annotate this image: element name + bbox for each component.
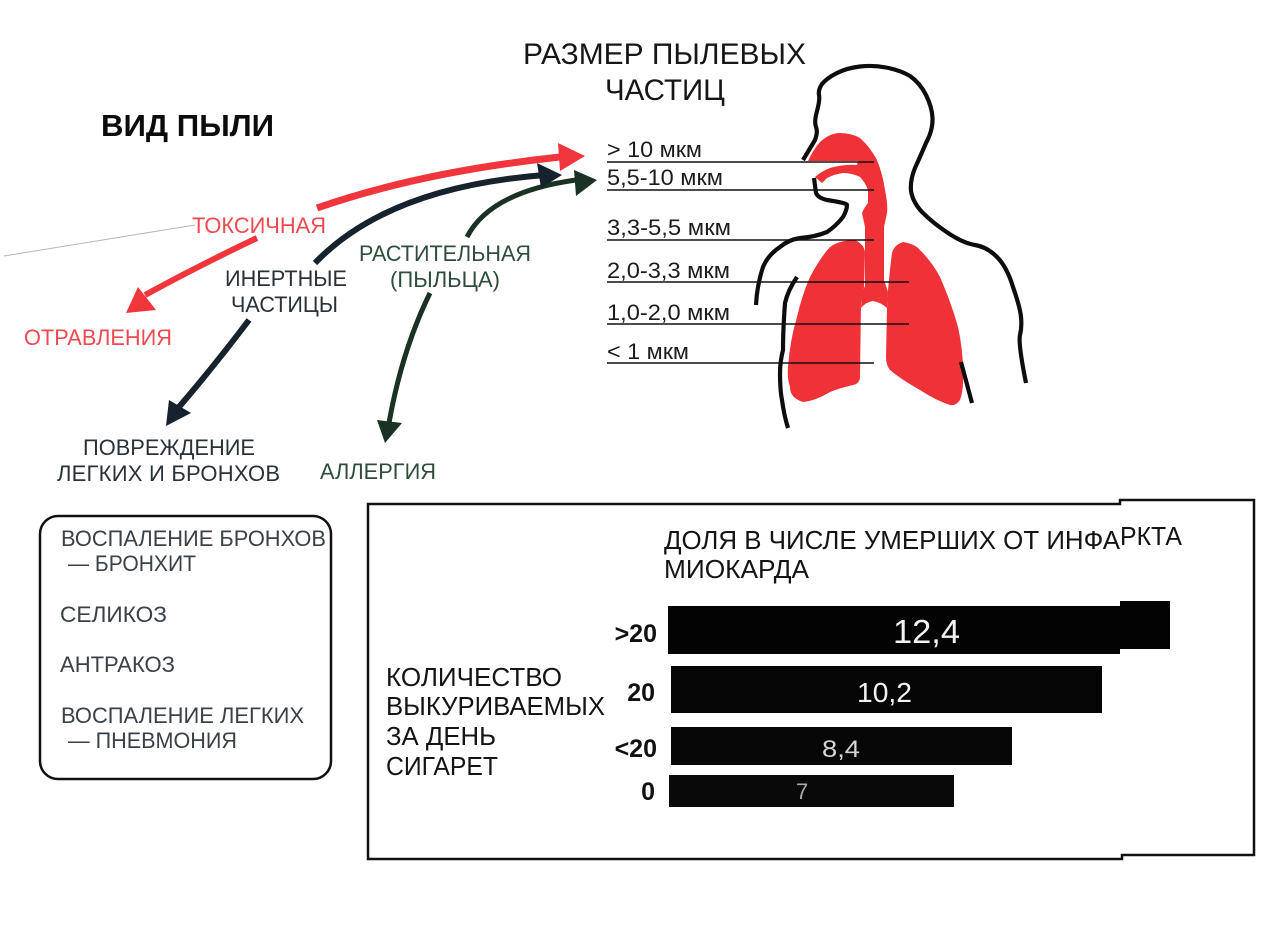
size labels: < 1 мкм — [607, 339, 689, 364]
chart title: МИОКАРДА — [664, 554, 810, 584]
chart title — [664, 521, 1183, 584]
axis label: СИГАРЕТ — [386, 751, 498, 781]
disease list — [60, 526, 326, 753]
size labels: 2,0-3,3 мкм — [607, 258, 730, 283]
bar chart: 8,4 — [822, 736, 860, 763]
axis label: КОЛИЧЕСТВО — [386, 662, 562, 692]
title: dust type: ВИД ПЫЛИ — [101, 108, 274, 143]
arrow: inert particles — [166, 163, 562, 426]
icon: lungs and airways — [788, 133, 963, 405]
disease list: СЕЛИКОЗ — [60, 602, 167, 627]
icon: head and torso outline — [756, 66, 1026, 428]
label: lung and bronchial damage: ЛЕГКИХ И БРОНХОВ — [57, 461, 280, 486]
panel: smoking chart — [368, 500, 1254, 859]
bar chart: 20 — [627, 679, 655, 707]
disease list: ВОСПАЛЕНИЕ БРОНХОВ — [61, 526, 326, 551]
chart title: ДОЛЯ В ЧИСЛЕ УМЕРШИХ ОТ ИНФА — [664, 525, 1121, 555]
label: lung and bronchial damage — [57, 435, 280, 486]
size scale — [607, 137, 909, 364]
size labels: > 10 мкм — [607, 137, 702, 162]
title: particle size: ЧАСТИЦ — [605, 74, 725, 107]
label: allergy: АЛЛЕРГИЯ — [320, 459, 436, 484]
bar chart: 12,4 — [893, 613, 960, 650]
label: plant pollen: (ПЫЛЬЦА) — [390, 267, 500, 292]
human body outline and respiratory tract — [756, 66, 1026, 428]
disease list: ВОСПАЛЕНИЕ ЛЕГКИХ — [61, 703, 304, 728]
label: toxic: ТОКСИЧНАЯ — [192, 213, 326, 238]
label: poisoning: ОТРАВЛЕНИЯ — [24, 325, 172, 350]
label: plant pollen — [359, 241, 531, 292]
bar chart: <20 — [615, 735, 657, 763]
chart title: РКТА — [1120, 521, 1183, 551]
bar chart — [615, 601, 1170, 807]
label: plant pollen: РАСТИТЕЛЬНАЯ — [359, 241, 531, 266]
arrow: toxic dust — [126, 143, 585, 313]
title: particle size — [523, 38, 806, 107]
label: inert particles — [225, 266, 347, 317]
axis label: ВЫКУРИВАЕМЫХ — [386, 691, 605, 721]
disease list: — ПНЕВМОНИЯ — [68, 728, 237, 753]
axis label — [386, 662, 605, 781]
axis label: ЗА ДЕНЬ — [386, 721, 496, 751]
bar chart: 7 — [796, 779, 808, 804]
title: particle size: РАЗМЕР ПЫЛЕВЫХ — [523, 38, 806, 71]
size labels — [607, 137, 731, 364]
bar chart: >20 — [615, 620, 657, 648]
label: lung and bronchial damage: ПОВРЕЖДЕНИЕ — [83, 435, 255, 460]
bar chart: 0 — [641, 778, 655, 806]
label: inert particles: ИНЕРТНЫЕ — [225, 266, 347, 291]
disease list: — БРОНХИТ — [68, 551, 196, 576]
size labels: 1,0-2,0 мкм — [607, 300, 730, 325]
label: inert particles: ЧАСТИЦЫ — [231, 292, 338, 317]
size labels: 5,5-10 мкм — [607, 165, 723, 190]
size labels: 3,3-5,5 мкм — [607, 215, 731, 240]
bar chart: 10,2 — [857, 677, 912, 708]
disease list: АНТРАКОЗ — [60, 652, 175, 677]
panel: diseases — [40, 516, 331, 779]
arrow: plant pollen — [377, 170, 597, 443]
